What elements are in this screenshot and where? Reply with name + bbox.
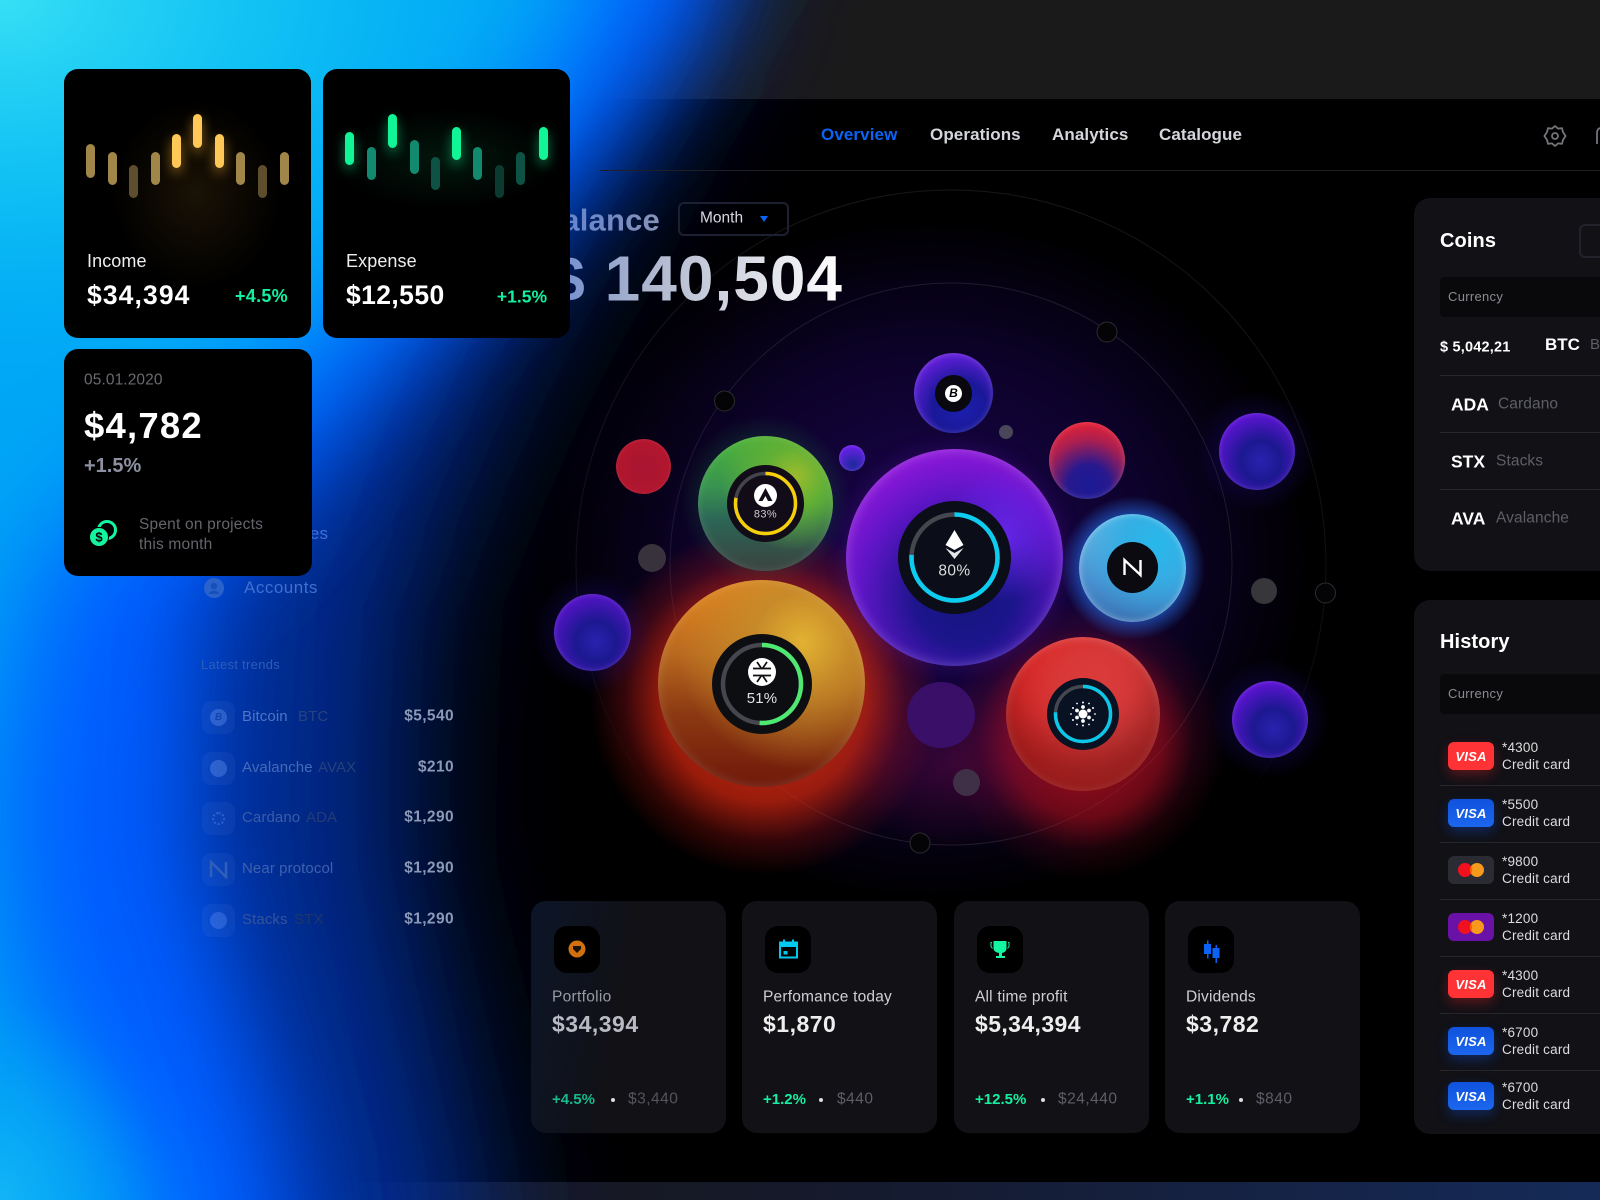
bubble: purple right top (1219, 413, 1295, 490)
row: bitcoin: $5,540 (404, 708, 454, 725)
history row 2: Credit card (1502, 814, 1570, 829)
history row 7: *6700 (1502, 1080, 1538, 1095)
profit change: +12.5% (975, 1091, 1026, 1108)
income bars (86, 113, 289, 198)
panel: history (1414, 600, 1600, 1134)
history row 3 (1448, 854, 1570, 886)
bubble: dark purple (907, 682, 975, 748)
history row 2: *5500 (1502, 797, 1538, 812)
row: stacks: STX (294, 911, 323, 928)
icon: trophy (977, 926, 1023, 973)
row: near protocol: $1,290 (404, 860, 454, 877)
history table header: Currency (1448, 686, 1503, 701)
history row 6: *6700 (1502, 1025, 1538, 1040)
dividends label: Dividends (1186, 989, 1256, 1006)
icon: settings gear (1544, 125, 1566, 147)
total balance value: $ 140,504 (549, 243, 843, 315)
row: near protocol (202, 853, 454, 886)
portfolio delta: $3,440 (628, 1091, 678, 1108)
performance label: Perfomance today (763, 989, 892, 1006)
coin row: BTC: $ 5,042,21 (1440, 339, 1511, 355)
bubble: small red (616, 439, 671, 494)
heading: balance: Balance (540, 202, 660, 237)
card: expense (323, 69, 570, 338)
coins title: Coins (1440, 230, 1496, 252)
history row 5: Credit card (1502, 985, 1570, 1000)
coin row: BTC (1440, 335, 1600, 355)
spent text (139, 516, 263, 553)
coin row: BTC: BTC (1545, 335, 1580, 354)
row: avalanche: Avalanche (242, 759, 313, 776)
history row 7: Credit card (1502, 1097, 1570, 1112)
performance change: +1.2% (763, 1091, 806, 1108)
icon: near (1107, 542, 1158, 593)
history row 6: VISA (1455, 1034, 1487, 1048)
icon: coins (90, 520, 117, 546)
icon: candles (1188, 926, 1234, 973)
row: bitcoin (202, 701, 454, 734)
coins table header (1440, 277, 1600, 317)
portfolio value: $34,394 (552, 1011, 639, 1037)
menu item: currencies: Currencies (244, 524, 328, 543)
main nav (600, 99, 1600, 171)
expense value: $12,550 (346, 280, 445, 310)
coin row: STX: STX (1451, 452, 1485, 472)
expense change: +1.5% (497, 286, 547, 306)
spent text: this month (139, 536, 213, 553)
row: bitcoin: B (215, 712, 222, 723)
portfolio label: Portfolio (552, 989, 612, 1006)
ring: cardano (1047, 678, 1119, 750)
panel: coins (1414, 198, 1600, 571)
icon: portfolio (554, 926, 600, 973)
coin row: AVA (1451, 508, 1569, 528)
label: latest trends: Latest trends (201, 657, 280, 672)
coin row: ADA: ADA (1451, 394, 1489, 414)
history row 5: *4300 (1502, 968, 1538, 983)
nav: catalogue: Catalogue (1159, 125, 1242, 144)
coins table header: Currency (1448, 289, 1503, 304)
bubble: red blue (1049, 422, 1125, 499)
coin row: ADA (1451, 394, 1558, 414)
bubble: purple right bottom (1232, 681, 1308, 758)
history row 3: *9800 (1502, 854, 1538, 869)
profit value: $5,34,394 (975, 1011, 1081, 1037)
row: bitcoin: BTC (298, 708, 328, 725)
history row 4 (1448, 911, 1570, 943)
icon: cardano dots (1070, 702, 1096, 726)
nav: analytics: Analytics (1052, 125, 1128, 144)
row: cardano: ADA (306, 809, 337, 826)
row: stacks: Stacks (242, 911, 288, 928)
sidebar: faded menu (201, 524, 328, 672)
performance value: $1,870 (763, 1011, 836, 1037)
history row 7 (1442, 1080, 1570, 1122)
income value: $34,394 (87, 280, 190, 310)
expense bars (336, 113, 556, 198)
card: date summary (64, 349, 312, 576)
profit label: All time profit (975, 989, 1068, 1006)
row: cardano (202, 802, 454, 835)
nav: overview: Overview (821, 125, 897, 144)
history row 6: Credit card (1502, 1042, 1570, 1057)
history row 1: *4300 (1502, 740, 1538, 755)
icon: calendar (765, 926, 811, 973)
bubble: small purple (839, 445, 865, 471)
dividends value: $3,782 (1186, 1011, 1259, 1037)
dropdown: month (678, 202, 789, 236)
latest trends rows (202, 701, 454, 937)
history row 2: VISA (1455, 806, 1487, 820)
history title: History (1440, 631, 1510, 653)
card: income (64, 69, 311, 338)
icon: bell (1596, 127, 1600, 144)
bubble: near (1079, 514, 1186, 622)
bubble: cardano (1006, 637, 1160, 791)
summary change: +1.5% (84, 455, 141, 477)
history table header (1440, 674, 1600, 714)
income change: +4.5% (235, 286, 288, 306)
coins filter button (1579, 224, 1600, 258)
history row 7: VISA (1455, 1088, 1487, 1104)
bubble: avalanche (698, 436, 833, 571)
coin row: STX (1451, 452, 1543, 472)
bubble: stacks (658, 580, 865, 787)
history row 4: *1200 (1502, 911, 1538, 926)
history row 4: Credit card (1502, 928, 1570, 943)
ring: ethereum 80%: 80% (938, 563, 971, 580)
icon: bitcoin: B (949, 386, 958, 400)
panel: performance today (742, 901, 937, 1133)
bubble: bitcoin (914, 353, 993, 433)
expense label: Expense (346, 251, 417, 271)
panel: dividends (1165, 901, 1360, 1133)
history row 1: VISA (1455, 748, 1487, 764)
coin row: AVA: AVA (1451, 508, 1485, 528)
spent text: Spent on projects (139, 516, 263, 533)
dividends delta: $840 (1256, 1091, 1292, 1108)
ring: stacks 51%: 51% (747, 690, 777, 707)
bubble: ethereum (846, 449, 1063, 666)
history row 2 (1442, 797, 1570, 838)
history row 6 (1442, 1025, 1570, 1066)
performance delta: $440 (837, 1091, 873, 1108)
bubble: small grey top (999, 425, 1013, 439)
row: near protocol: Near protocol (242, 860, 333, 877)
icon: bitcoin (935, 375, 972, 412)
panel: all time profit (954, 901, 1149, 1133)
row: avalanche: AVAX (318, 759, 356, 776)
row: stacks: $1,290 (404, 911, 454, 928)
row: avalanche (202, 752, 454, 785)
panel: portfolio (531, 901, 726, 1133)
dividends change: +1.1% (1186, 1091, 1229, 1108)
portfolio change: +4.5% (552, 1091, 595, 1108)
row: cardano: Cardano (242, 809, 300, 826)
row: cardano: $1,290 (404, 809, 454, 826)
summary value: $4,782 (84, 405, 203, 446)
coin row: AVA: Avalanche (1496, 510, 1569, 527)
history row 1 (1442, 740, 1570, 782)
history row 3: Credit card (1502, 871, 1570, 886)
date: 05.01.2020 (84, 372, 163, 389)
history row 5 (1442, 968, 1570, 1010)
ring: avalanche 83% (727, 465, 804, 542)
ring: ethereum 80% (898, 501, 1011, 614)
coin row: ADA: Cardano (1498, 396, 1558, 413)
row: bitcoin: Bitcoin (242, 708, 288, 725)
ring: stacks 51% (712, 634, 812, 734)
icon: coins: $ (95, 530, 103, 544)
row: stacks (202, 904, 454, 937)
dropdown: month: Month (700, 210, 743, 227)
menu item: accounts: Accounts (244, 578, 318, 597)
coin row: STX: Stacks (1496, 453, 1543, 470)
row: avalanche: $210 (418, 759, 454, 776)
icon: accounts (204, 578, 224, 598)
income label: Income (87, 251, 147, 271)
bubble: grey right (1251, 578, 1277, 604)
bubble: grey bottom (953, 769, 980, 796)
history row 1: Credit card (1502, 757, 1570, 772)
profit delta: $24,440 (1058, 1091, 1118, 1108)
nav: operations: Operations (930, 125, 1021, 144)
bubble: purple left (554, 594, 631, 671)
bubble: grey left (638, 544, 666, 572)
history row 5: VISA (1455, 976, 1487, 992)
ring: avalanche 83%: 83% (754, 508, 777, 520)
